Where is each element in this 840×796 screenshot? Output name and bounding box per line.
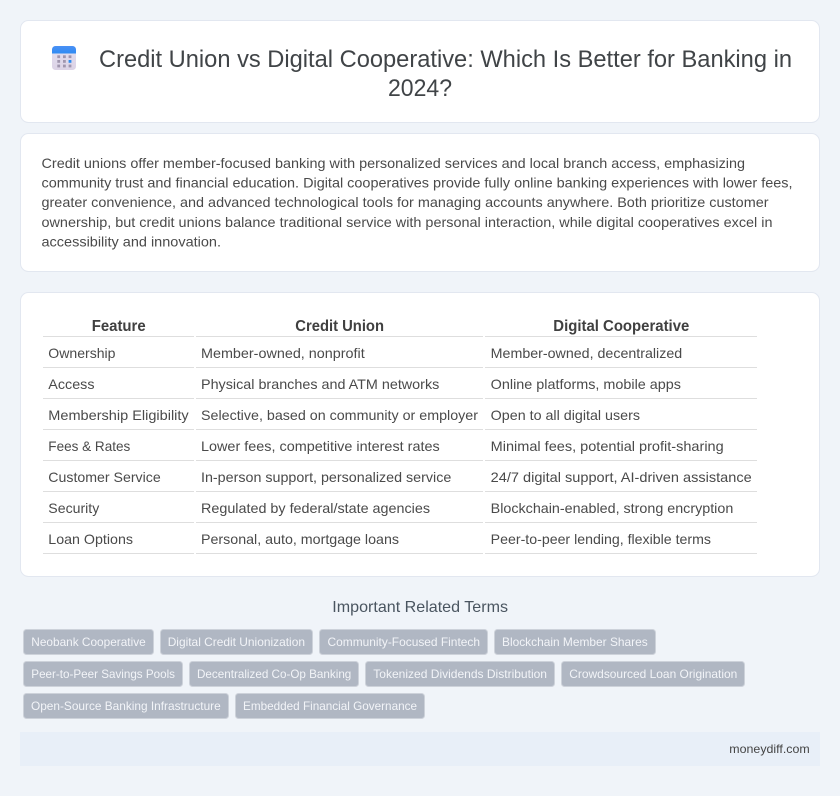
table row: Membership Eligibility: Membership Eligibility — [48, 407, 189, 423]
tag: Embedded Financial Governance: Embedded Financial Governance — [243, 699, 417, 713]
panel: comparison table — [20, 292, 820, 576]
tag: Decentralized Co-Op Banking — [190, 662, 358, 686]
tag: Open-Source Banking Infrastructure: Open-Source Banking Infrastructure — [31, 699, 221, 713]
table row: Fees and Rates — [43, 438, 757, 461]
table row: Access: Access — [48, 376, 94, 392]
icon: calendar — [52, 46, 76, 70]
text block: introduction paragraph: greater convenience, and advanced technological tools for managing accounts anywhere. Both prioritize customer — [42, 194, 769, 210]
table row: Membership Eligibility — [43, 407, 757, 430]
tag: Neobank Cooperative: Neobank Cooperative — [31, 635, 146, 649]
table row: Access: Physical branches and ATM networks — [201, 376, 439, 392]
table row: Customer Service — [43, 469, 757, 492]
table header row: Feature — [92, 318, 146, 335]
table row: Security: Blockchain-enabled, strong encryption — [491, 500, 733, 516]
panel: header — [20, 20, 820, 122]
table row: Loan Options: Loan Options — [48, 531, 133, 547]
heading: important related terms: Important Related Terms — [332, 599, 508, 616]
tag: Embedded Financial Governance — [236, 694, 424, 718]
tag: Peer-to-Peer Savings Pools — [24, 662, 182, 686]
table row: Access: Online platforms, mobile apps — [491, 376, 681, 392]
tag: Tokenized Dividends Distribution: Tokenized Dividends Distribution — [373, 667, 547, 681]
tag: Community-Focused Fintech: Community-Focused Fintech — [328, 635, 480, 649]
tag: Peer-to-Peer Savings Pools: Peer-to-Peer Savings Pools — [31, 667, 175, 681]
footer bar — [20, 732, 820, 766]
title: Credit Union vs Digital Cooperative: Which Is Better for Banking in — [99, 46, 792, 73]
table row: Fees and Rates: Lower fees, competitive interest rates — [201, 438, 440, 454]
table row: Fees and Rates: Fees & Rates — [48, 438, 130, 454]
table row: Customer Service: In-person support, personalized service — [201, 469, 452, 485]
tag: Community-Focused Fintech — [320, 630, 488, 654]
table row: Customer Service: Customer Service — [48, 469, 161, 485]
text block: introduction paragraph: community trust and financial education. Digital cooperatives provide fully online banking experiences with lower fees, — [42, 175, 792, 191]
table row: Access — [43, 376, 757, 399]
footer source text: moneydiff.com — [729, 742, 810, 756]
tag: Neobank Cooperative — [24, 630, 154, 654]
tag: Open-Source Banking Infrastructure — [24, 694, 228, 718]
tag list — [24, 630, 744, 718]
tag: Digital Credit Unionization — [160, 630, 312, 654]
table row: Membership Eligibility: Selective, based on community or employer — [201, 407, 478, 423]
table row: Ownership: Member-owned, nonprofit — [201, 345, 365, 361]
tag: Blockchain Member Shares — [494, 630, 656, 654]
table header row: Credit Union — [295, 318, 384, 335]
tag: Tokenized Dividends Distribution — [366, 662, 554, 686]
text block: introduction paragraph — [42, 155, 792, 249]
table row: Loan Options: Peer-to-peer lending, flexible terms — [491, 531, 711, 547]
table row: Customer Service: 24/7 digital support, AI-driven assistance — [491, 469, 752, 485]
table row: Ownership — [43, 345, 757, 368]
table row: Ownership: Ownership — [48, 345, 116, 361]
text block: introduction paragraph: Credit unions offer member-focused banking with personalized services and local branch access, emphasizing — [42, 155, 745, 171]
table row: Fees and Rates: Minimal fees, potential profit-sharing — [491, 438, 724, 454]
table row: Loan Options: Personal, auto, mortgage loans — [201, 531, 399, 547]
tag: Crowdsourced Loan Origination: Crowdsourced Loan Origination — [569, 667, 737, 681]
table row: Loan Options — [43, 531, 757, 554]
table header row — [43, 318, 757, 337]
title: 2024? — [388, 75, 452, 102]
text block: introduction paragraph: ownership, but credit unions balance traditional service with personal interaction, while digital cooperatives excel in — [42, 214, 772, 230]
table row: Security: Security — [48, 500, 99, 516]
panel: introduction — [20, 134, 820, 272]
table row: Security: Regulated by federal/state agencies — [201, 500, 430, 516]
table header row: Digital Cooperative — [553, 318, 689, 335]
tag: Crowdsourced Loan Origination — [562, 662, 744, 686]
tag: Digital Credit Unionization: Digital Credit Unionization — [168, 635, 305, 649]
title — [99, 46, 792, 102]
table row: Membership Eligibility: Open to all digital users — [491, 407, 640, 423]
table row: Ownership: Member-owned, decentralized — [491, 345, 682, 361]
text block: introduction paragraph: accessibility and innovation. — [42, 233, 221, 249]
tag: Decentralized Co-Op Banking: Decentralized Co-Op Banking — [197, 667, 351, 681]
tag: Blockchain Member Shares: Blockchain Member Shares — [502, 635, 648, 649]
table row: Security — [43, 500, 757, 523]
